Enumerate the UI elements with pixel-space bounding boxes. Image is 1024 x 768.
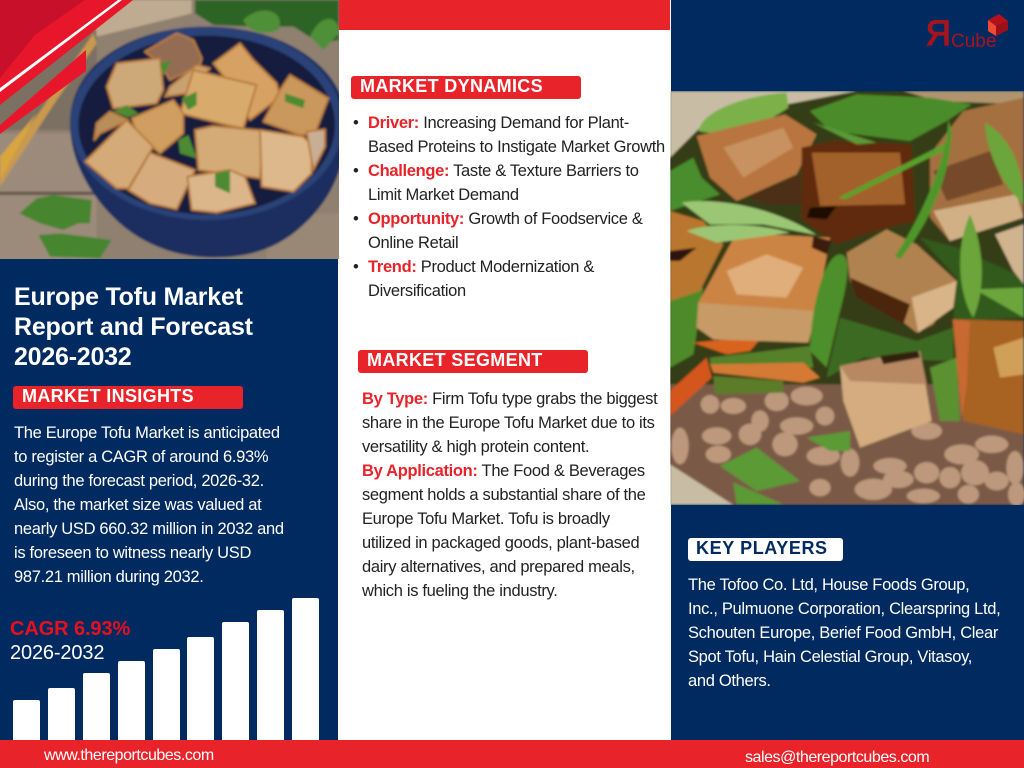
text: market insights: The Europe Tofu Market is anticipated [14,424,280,442]
heading: market dynamics: MARKET DYNAMICS [360,76,543,96]
text: key players [688,576,1000,690]
list: market dynamics: Trend: Product Modernization & [368,258,594,276]
scallions [682,201,817,243]
text: market segment: By Type: Firm Tofu type grabs the biggest [362,390,657,408]
heading: market insights [13,386,243,409]
heading: market dynamics [351,76,581,99]
list: market dynamics: • [353,210,358,228]
photo: tofu in a blue bowl [0,0,339,259]
text: market insights: Also, the market size was valued at [14,496,261,514]
list: market dynamics: Driver: Increasing Demand for Plant- [368,114,629,132]
text: market insights: during the forecast period, 2026-32. [14,472,264,490]
panel: red top band of middle column [339,0,670,30]
list: market dynamics: Based Proteins to Instigate Market Growth [368,138,665,156]
text: market insights: 987.21 million during 2032. [14,568,204,586]
heading: market segment [358,350,588,373]
text: market segment: share in the Europe Tofu Market due to its [362,414,655,432]
title [14,283,253,371]
parsley on table [19,195,112,258]
list: market dynamics: • [353,114,358,132]
text: market insights [14,424,284,586]
text: key players: The Tofoo Co. Ltd, House Foods Group, [688,576,969,594]
text: key players: Spot Tofu, Hain Celestial Group, Vitasoy, [688,648,972,666]
list: market dynamics: • [353,162,358,180]
panel: right navy column [671,0,1024,740]
text: market insights: to register a CAGR of around 6.93% [14,448,268,466]
label: period: 2026-2032 [10,642,104,664]
text: key players: Inc., Pulmuone Corporation, Clearspring Ltd, [688,600,1000,618]
text: market segment: Europe Tofu Market. Tofu is broadly [362,510,610,528]
text: market segment: dairy alternatives, and prepared meals, [362,558,635,576]
bar chart: growth [13,598,319,740]
list: market dynamics: • [353,258,358,276]
heading: market insights: MARKET INSIGHTS [22,386,194,406]
decoration: red corner ribbons [0,0,133,134]
label: CAGR: CAGR 6.93% [10,618,130,640]
list: market dynamics [353,114,665,300]
tofu [697,114,817,201]
text: market insights: nearly USD 660.32 million in 2032 and [14,520,284,538]
heading: market segment: MARKET SEGMENT [367,350,543,370]
text: market segment: versatility & high protein content. [362,438,589,456]
list: market dynamics: Online Retail [368,234,458,252]
text: market segment: utilized in packaged goods, plant-based [362,534,639,552]
herbs on tofu [113,60,305,193]
photo: glazed tofu with scallions and farro [670,91,1024,505]
tofu cubes [85,33,328,213]
text: market segment: By Application: The Food & Beverages [362,462,645,480]
text: market segment: segment holds a substantial share of the [362,486,645,504]
heading: key players: KEY PLAYERS [696,538,828,558]
bowl [70,27,347,257]
grains [670,384,1024,505]
vegetables [670,288,703,368]
title: Europe Tofu Market [14,283,243,311]
text: market segment: which is fueling the industry. [362,582,558,600]
text: market segment [362,390,658,600]
logo: RCube [926,14,1008,50]
footer: email: sales@thereportcubes.com [745,749,929,766]
text: market insights: is foreseen to witness nearly USD [14,544,251,562]
footer: website: www.thereportcubes.com [44,747,214,764]
text: key players: and Others. [688,672,771,690]
panel: left navy column [0,259,338,740]
text: key players: Schouten Europe, Berief Food GmbH, Clear [688,624,998,642]
footer band [0,740,1024,768]
list: market dynamics: Limit Market Demand [368,186,519,204]
list: market dynamics: Opportunity: Growth of Foodservice & [368,210,643,228]
title: 2026-2032 [14,343,132,371]
title: Report and Forecast [14,313,253,341]
list: market dynamics: Diversification [368,282,466,300]
list: market dynamics: Challenge: Taste & Texture Barriers to [368,162,639,180]
